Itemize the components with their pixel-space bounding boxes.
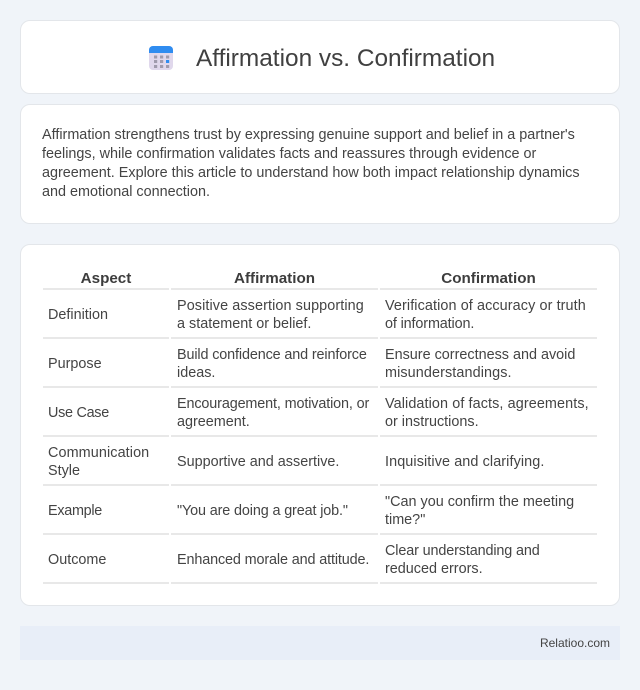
comparison table: Inquisitive and clarifying. — [385, 454, 544, 470]
comparison table: Build confidence and reinforce — [177, 347, 367, 363]
comparison table: Confirmation — [441, 270, 536, 287]
comparison table: Style — [48, 463, 80, 479]
comparison table: Example — [48, 503, 102, 519]
comparison table: Positive assertion supporting — [177, 298, 364, 314]
intro text — [42, 127, 580, 200]
comparison table: a statement or belief. — [177, 316, 311, 332]
title card — [20, 20, 620, 94]
comparison table: or instructions. — [385, 414, 479, 430]
comparison table: Use Case — [48, 405, 109, 421]
comparison table: Definition — [48, 307, 108, 323]
intro text: and emotional connection. — [42, 184, 210, 200]
comparison table: ideas. — [177, 365, 215, 381]
comparison table: Supportive and assertive. — [177, 454, 339, 470]
comparison table: of information. — [385, 316, 474, 332]
comparison table: "Can you confirm the meeting — [385, 494, 574, 510]
comparison table: Affirmation — [234, 270, 315, 287]
footer bar — [20, 626, 620, 660]
comparison table: Validation of facts, agreements, — [385, 396, 589, 412]
intro text: feelings, while confirmation validates facts and reassures through evidence or — [42, 146, 536, 162]
comparison table: Enhanced morale and attitude. — [177, 552, 369, 568]
comparison table: Communication — [48, 445, 149, 461]
comparison table: Aspect — [81, 270, 131, 287]
intro card — [20, 104, 620, 224]
title: Affirmation vs. Confirmation — [196, 45, 495, 72]
comparison table: "You are doing a great job." — [177, 503, 348, 519]
footer text: Relatioo.com — [540, 636, 610, 650]
comparison table: Purpose — [48, 356, 102, 372]
table card — [20, 244, 620, 606]
comparison table: agreement. — [177, 414, 250, 430]
comparison table: misunderstandings. — [385, 365, 512, 381]
intro text: agreement. Explore this article to understand how both impact relationship dynamics — [42, 165, 580, 181]
comparison table: Outcome — [48, 552, 106, 568]
comparison table: Verification of accuracy or truth — [385, 298, 586, 314]
intro text: Affirmation strengthens trust by expressing genuine support and belief in a partner's — [42, 127, 575, 143]
comparison table: reduced errors. — [385, 561, 483, 577]
comparison table: Clear understanding and — [385, 543, 540, 559]
comparison table: Encouragement, motivation, or — [177, 396, 369, 412]
comparison table: time?" — [385, 512, 425, 528]
icon: calendar — [149, 46, 173, 70]
comparison table: Ensure correctness and avoid — [385, 347, 575, 363]
comparison table — [43, 270, 597, 584]
